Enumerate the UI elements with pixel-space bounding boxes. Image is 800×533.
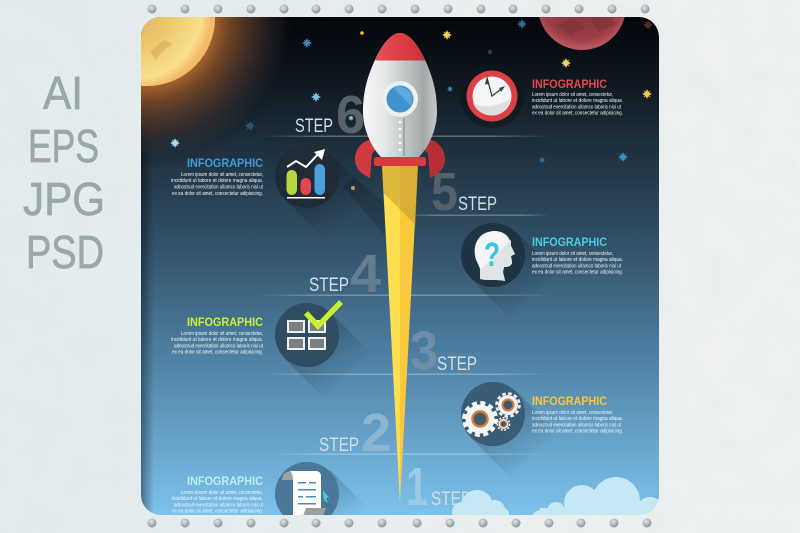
text block: step 2: Lorem ipsum dolor sit amet, consectetur, bbox=[532, 410, 613, 416]
step 3 label: STEP bbox=[437, 354, 477, 375]
rocket nose bbox=[374, 33, 426, 60]
text block: step 3: ex ea dolor sit amet, consectetur adipisicing. bbox=[172, 350, 263, 356]
right fin bbox=[423, 139, 445, 178]
step 5 label bbox=[432, 173, 496, 210]
step 1 label: 1 bbox=[406, 457, 428, 517]
text block: step 5: ex ea dolor sit amet, consectetur adipisicing. bbox=[532, 110, 623, 116]
text block: step 2: INFOGRAPHIC bbox=[532, 394, 607, 408]
rocket body bbox=[363, 33, 437, 157]
file format list: EPS bbox=[28, 120, 99, 172]
text block: step 4: incididunt ut labore et dolore magna aliqua. bbox=[532, 257, 623, 263]
step 6 label bbox=[296, 96, 364, 134]
text block: step 5: INFOGRAPHIC bbox=[532, 77, 607, 91]
text block: step 6: Lorem ipsum dolor sit amet, consectetur, bbox=[181, 172, 263, 178]
file format list: PSD bbox=[26, 226, 104, 278]
text block: step 3: Lorem ipsum dolor sit amet, consectetur, bbox=[181, 331, 263, 337]
text block: step 3: INFOGRAPHIC bbox=[187, 315, 263, 329]
step 3 label bbox=[411, 331, 476, 370]
file format list: AI bbox=[43, 67, 83, 119]
rocket window bbox=[382, 81, 418, 117]
step 5 label: 5 bbox=[431, 162, 458, 222]
rocket base bbox=[374, 157, 426, 166]
text block: step 6: INFOGRAPHIC bbox=[187, 156, 263, 170]
step 4 icon: head with question mark: ? bbox=[484, 236, 500, 274]
step divider lines bbox=[260, 136, 550, 455]
sun with glow bbox=[141, 17, 283, 149]
text block: step 5: incididunt ut labore et dolore magna aliqua. bbox=[532, 98, 623, 104]
step 4 label: 4 bbox=[350, 244, 381, 304]
text block: step 5: Lorem ipsum dolor sit amet, consectetur, bbox=[532, 92, 613, 98]
step 1 label bbox=[408, 468, 469, 505]
step 4 label bbox=[310, 255, 381, 292]
text block: step 6: ex ea dolor sit amet, consectetur adipisicing. bbox=[172, 191, 263, 197]
step 6 icon: growth chart bbox=[275, 149, 355, 225]
text block: step 3 bbox=[171, 315, 264, 356]
text block: step 2 bbox=[532, 394, 623, 434]
step 2 label bbox=[320, 414, 389, 451]
step 5 label: STEP bbox=[458, 194, 497, 215]
step 4 icon: head with question mark bbox=[461, 223, 545, 310]
step 1 icon: document scroll bbox=[275, 462, 360, 515]
text block: step 2: ex ea dolor sit amet, consectetur adipisicing. bbox=[532, 428, 623, 434]
text block: step 1: Lorem ipsum dolor sit amet, consectetur, bbox=[181, 490, 263, 496]
text block: step 6: incididunt ut labore et dolore magna aliqua. bbox=[171, 178, 263, 184]
text block: step 4: Lorem ipsum dolor sit amet, consectetur, bbox=[532, 251, 613, 257]
step 2 label: 2 bbox=[361, 403, 391, 463]
step 3 icon: checklist bbox=[275, 302, 370, 398]
text block: step 6: adnostrud exercitation ullamco laboris nisi ut bbox=[174, 184, 264, 190]
rocket flame bbox=[343, 165, 418, 503]
text block: step 1 bbox=[172, 474, 264, 514]
text block: step 1: INFOGRAPHIC bbox=[187, 474, 263, 488]
text block: step 4: ex ea dolor sit amet, consectetur adipisicing. bbox=[532, 270, 623, 276]
text block: step 2: incididunt ut labore et dolore magna aliqua. bbox=[532, 416, 623, 422]
step 5 icon: clock bbox=[460, 70, 524, 128]
file format list bbox=[23, 67, 105, 278]
step 6 label: 6 bbox=[336, 85, 365, 145]
step 1 label: STEP bbox=[431, 489, 471, 510]
step 3 label: 3 bbox=[410, 321, 438, 381]
step 4 label: STEP bbox=[309, 275, 349, 296]
rocket bbox=[355, 33, 445, 178]
planet mars bbox=[539, 17, 625, 50]
text block: step 5: adnostrud exercitation ullamco laboris nisi ut bbox=[532, 104, 622, 110]
file format list: JPG bbox=[23, 173, 105, 225]
text block: step 5 bbox=[532, 77, 623, 116]
text block: step 4 bbox=[532, 235, 623, 276]
text block: step 1: adnostrud exercitation ullamco laboris nisi ut bbox=[174, 502, 264, 508]
text block: step 3: incididunt ut labore et dolore magna aliqua. bbox=[171, 337, 263, 343]
left fin bbox=[355, 139, 377, 178]
text block: step 6 bbox=[171, 156, 264, 197]
rivets: top and bottom rows bbox=[148, 4, 652, 528]
rivets and seam bbox=[399, 118, 404, 156]
clouds bbox=[452, 477, 658, 515]
panel: space to sky scene bbox=[141, 17, 659, 515]
text block: step 1: ex ea dolor sit amet, consectetur adipisicing. bbox=[172, 508, 263, 514]
step 6 label: STEP bbox=[295, 116, 333, 137]
step 2 icon: gears bbox=[461, 382, 556, 477]
text block: step 4: adnostrud exercitation ullamco laboris nisi ut bbox=[532, 264, 622, 270]
stars bbox=[170, 19, 653, 190]
text block: step 3: adnostrud exercitation ullamco laboris nisi ut bbox=[174, 344, 264, 350]
text block: step 1: incididunt ut labore et dolore magna aliqua. bbox=[172, 496, 263, 502]
text block: step 4: INFOGRAPHIC bbox=[532, 235, 607, 249]
text block: step 2: adnostrud exercitation ullamco laboris nisi ut bbox=[532, 422, 622, 428]
step 2 label: STEP bbox=[319, 435, 359, 456]
